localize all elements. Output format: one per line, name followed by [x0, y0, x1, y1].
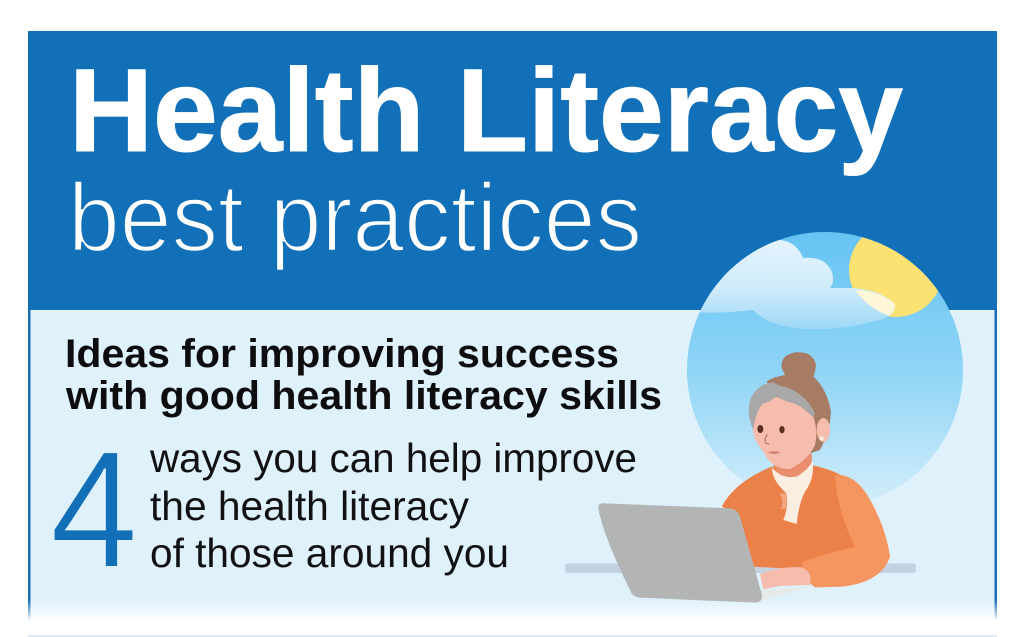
icon: cloud [685, 240, 895, 329]
sleeve [802, 475, 890, 587]
neck [772, 453, 813, 478]
bottom fade [26, 600, 999, 624]
icon: sun [849, 237, 938, 317]
title: Health Literacy [69, 45, 903, 177]
panel: blue header [28, 31, 997, 310]
text block: ways to help: ways you can help improve [149, 435, 637, 481]
hair back and bun [767, 352, 831, 453]
laptop [598, 503, 762, 603]
subtitle: best practices [68, 163, 642, 272]
eyes [757, 425, 785, 433]
earring [820, 436, 824, 440]
illustration: woman at laptop [565, 352, 916, 603]
sweater [722, 465, 860, 570]
text block: ways to help: of those around you [150, 530, 509, 576]
face [753, 397, 816, 469]
hand [760, 567, 811, 589]
scarf shadow [779, 493, 787, 509]
mouth [769, 452, 779, 454]
scarf [772, 460, 813, 524]
ear [817, 418, 830, 442]
heading: ideas: with good health literacy skills [65, 374, 662, 418]
text block: ways to help [149, 435, 637, 576]
heading: ideas: Ideas for improving success [65, 332, 619, 376]
panel side borders [28, 310, 997, 622]
keyboard [760, 587, 812, 600]
heading: ideas [65, 332, 662, 418]
nose [765, 434, 769, 444]
panel: light blue body [28, 310, 997, 622]
text block: ways to help: the health literacy [150, 483, 469, 529]
table [565, 563, 916, 573]
bottom rule [28, 635, 997, 637]
illustration: sky circle with sun and cloud [685, 223, 963, 508]
grey hair [749, 382, 815, 430]
sun glare through cloud [855, 290, 895, 316]
big number 4: 4 [50, 417, 138, 603]
